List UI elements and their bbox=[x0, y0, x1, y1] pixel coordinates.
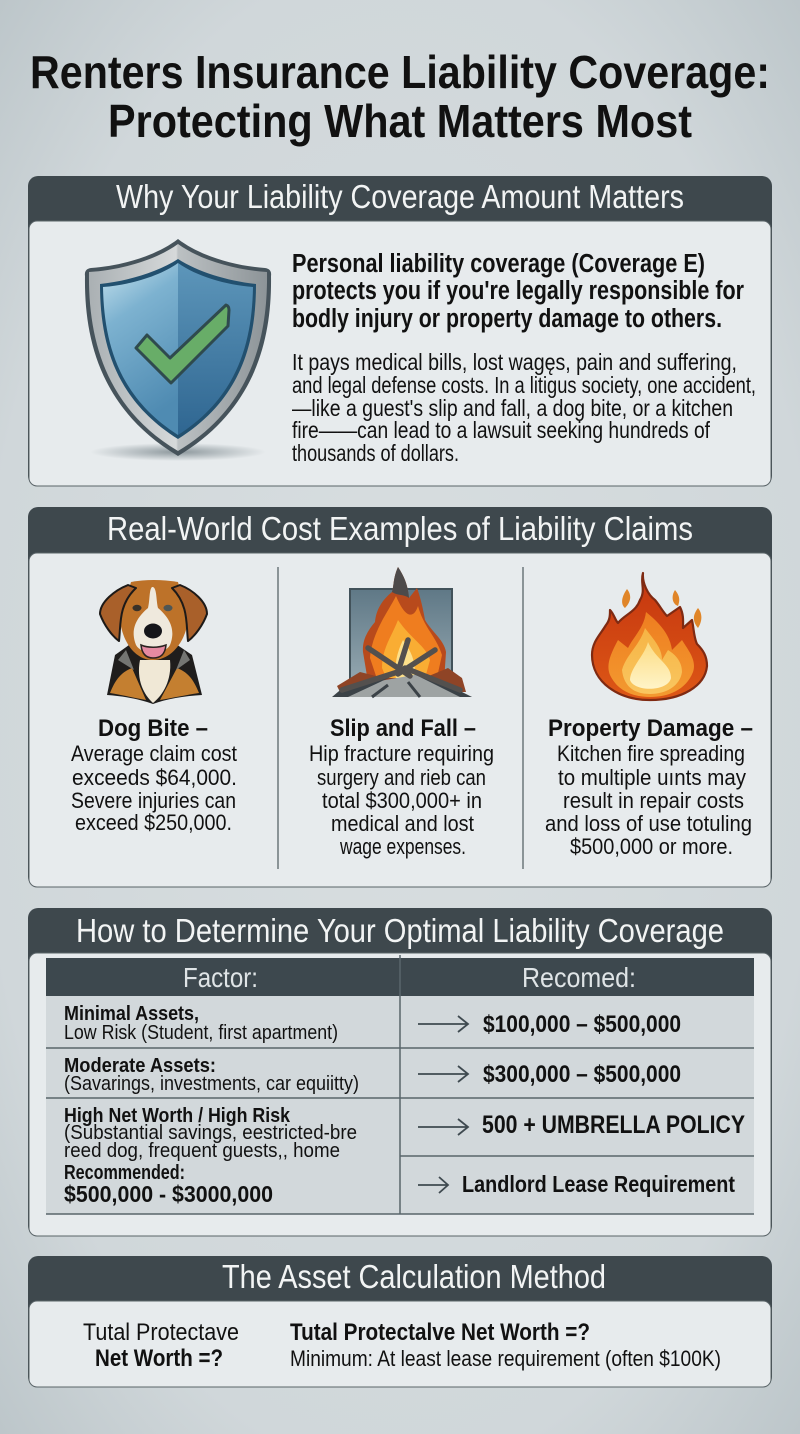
text: liability explanation: thousands of dollars. bbox=[292, 440, 459, 466]
recommended amounts: $300,000 – $500,000 bbox=[483, 1061, 681, 1088]
panel: asset calculation bbox=[28, 1256, 772, 1387]
icon: indoor fire on logs bbox=[332, 567, 472, 697]
heading: asset calculation: The Asset Calculation Method bbox=[222, 1258, 606, 1295]
row: high net worth bbox=[64, 1105, 357, 1207]
column: dog bite: Severe injuries can bbox=[71, 788, 236, 813]
column: slip and fall: surgery and rieb can bbox=[317, 765, 486, 790]
heading: cost examples: Real-World Cost Examples of Liability Claims bbox=[107, 510, 693, 547]
left formula bbox=[83, 1319, 239, 1372]
icon: flame bbox=[592, 573, 707, 700]
text: liability definition bbox=[292, 250, 744, 333]
column: slip and fall bbox=[309, 715, 494, 859]
column: property damage: to multiple uınts may bbox=[558, 765, 746, 790]
column: property damage: Property Damage – bbox=[548, 715, 753, 742]
column: property damage: $500,000 or more. bbox=[570, 834, 733, 859]
recommended amounts: 500 + UMBRELLA POLICY bbox=[482, 1111, 745, 1139]
row: high net worth: High Net Worth / High Risk bbox=[64, 1105, 291, 1127]
row: moderate assets: (Savarings, investments, car equiitty) bbox=[64, 1073, 359, 1095]
heading: optimal coverage: How to Determine Your Optimal Liability Coverage bbox=[76, 912, 724, 949]
table header bbox=[183, 962, 636, 993]
row: high net worth: $500,000 - $3000,000 bbox=[64, 1181, 273, 1207]
recommended amounts: $100,000 – $500,000 bbox=[483, 1011, 681, 1038]
row: minimal assets bbox=[64, 1003, 338, 1044]
column: property damage: Kitchen fire spreading bbox=[557, 741, 745, 766]
text: liability definition: Personal liability coverage (Coverage E) bbox=[292, 250, 705, 278]
row: moderate assets bbox=[64, 1055, 359, 1095]
table header: Recomed: bbox=[522, 962, 636, 993]
text: liability explanation: —like a guest's slip and fall, a dog bite, or a kitchen bbox=[292, 395, 733, 421]
column: dog bite bbox=[71, 715, 237, 835]
icon: dog bbox=[100, 580, 207, 704]
table header: Factor: bbox=[183, 962, 258, 993]
title: Protecting What Matters Most bbox=[108, 95, 692, 147]
row: moderate assets: Moderate Assets: bbox=[64, 1055, 216, 1077]
column: slip and fall: medical and lost bbox=[331, 811, 474, 836]
row: minimal assets: Minimal Assets, bbox=[64, 1003, 199, 1025]
arrows bbox=[418, 1016, 468, 1193]
recommended amounts: Landlord Lease Requirement bbox=[462, 1171, 735, 1197]
right formula bbox=[290, 1319, 721, 1371]
left formula: Net Worth =? bbox=[95, 1345, 223, 1372]
column: dog bite: exceeds $64,000. bbox=[72, 765, 237, 790]
recommended amounts bbox=[462, 1011, 745, 1197]
icon: shield with check mark bbox=[85, 239, 271, 461]
row: high net worth: (Substantial savings, eestricted-bre bbox=[64, 1122, 357, 1144]
column: slip and fall: Slip and Fall – bbox=[330, 715, 476, 742]
right formula: Minimum: At least lease requirement (often $100K) bbox=[290, 1346, 721, 1371]
heading: why coverage matters: Why Your Liability Coverage Amount Matters bbox=[116, 178, 684, 215]
row: high net worth: Recommended: bbox=[64, 1162, 185, 1184]
column: property damage: and loss of use totuling bbox=[545, 811, 752, 836]
text: liability explanation: fire——can lead to a lawsuit seeking hundreds of bbox=[292, 417, 711, 443]
panel: optimal coverage bbox=[28, 908, 772, 1236]
column: slip and fall: wage expenses. bbox=[339, 834, 466, 859]
column: dog bite: exceed $250,000. bbox=[75, 810, 232, 835]
column: slip and fall: Hip fracture requiring bbox=[309, 741, 494, 766]
text: liability definition: bodly injury or property damage to others. bbox=[292, 305, 722, 333]
left formula: Tutal Protectave bbox=[83, 1319, 239, 1346]
column: property damage: result in repair costs bbox=[563, 788, 744, 813]
text: liability explanation: It pays medical bills, lost wagęs, pain and suffering, bbox=[292, 349, 737, 375]
text: liability explanation bbox=[292, 349, 756, 466]
column: property damage bbox=[545, 715, 753, 859]
panel: why coverage matters bbox=[28, 176, 772, 486]
column: dog bite: Average claim cost bbox=[71, 741, 237, 766]
row: high net worth: reed dog, frequent guests,, home bbox=[64, 1140, 340, 1162]
row: minimal assets: Low Risk (Student, first apartment) bbox=[64, 1022, 338, 1044]
title bbox=[30, 46, 770, 147]
table: factors and recommended coverage bbox=[46, 955, 754, 1214]
column: slip and fall: total $300,000+ in bbox=[322, 788, 482, 813]
panel: cost examples bbox=[28, 507, 772, 887]
right formula: Tutal Protectalve Net Worth =? bbox=[290, 1319, 590, 1346]
column: dog bite: Dog Bite – bbox=[98, 715, 208, 742]
